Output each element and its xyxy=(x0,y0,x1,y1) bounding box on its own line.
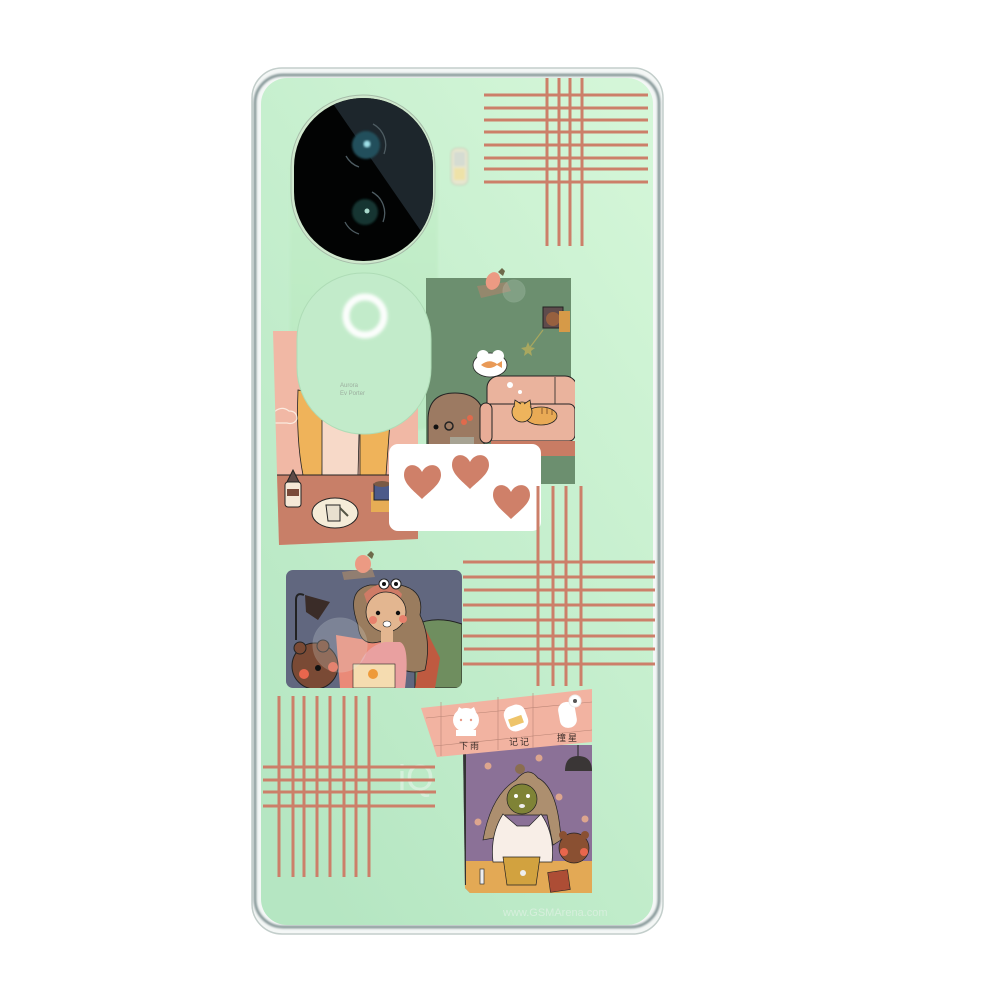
grid lines: top right xyxy=(484,78,648,246)
stars on wall xyxy=(474,754,588,826)
lamp xyxy=(296,594,330,640)
sofa xyxy=(480,376,575,484)
bunny sticker right xyxy=(557,695,581,729)
camera flash xyxy=(451,148,468,185)
girl xyxy=(353,579,428,688)
camera module xyxy=(291,95,435,264)
fish thought bubble xyxy=(473,350,507,377)
brand logo: iQ xyxy=(398,757,434,798)
pink washi tape with bunny stickers xyxy=(421,689,592,757)
carrot with tape above photo xyxy=(342,551,375,580)
wall picture xyxy=(543,307,570,332)
bunny sticker middle xyxy=(501,702,531,734)
bunny sticker left xyxy=(453,707,479,736)
sticker: pink kitchen scene xyxy=(273,331,420,547)
sweater xyxy=(492,814,553,862)
sticker: girl with popcorn and teddy xyxy=(286,570,462,689)
pink washi tape with bunny stickers: 记 记 xyxy=(509,735,529,748)
lens top xyxy=(346,124,386,167)
grid lines: middle right xyxy=(463,486,655,686)
round fingerprint pill module: Ev Porter xyxy=(340,391,365,397)
white card with hearts xyxy=(389,444,541,531)
round fingerprint pill module xyxy=(297,273,431,434)
small teddy xyxy=(559,831,589,863)
case outer frame xyxy=(252,68,663,934)
heart right xyxy=(493,485,530,519)
glowing ring xyxy=(346,297,384,335)
face with green mask xyxy=(507,784,537,814)
grid lines: lower left xyxy=(263,696,436,877)
cat xyxy=(512,400,557,425)
sticker: carrot with tape and bubble xyxy=(477,268,525,302)
plate with toast xyxy=(312,498,358,528)
phone back panel xyxy=(261,78,653,925)
sticker: girl with face mask xyxy=(463,740,592,893)
bottle xyxy=(285,470,301,507)
notebook xyxy=(548,870,570,892)
watermark: www.GSMArena.com xyxy=(502,907,608,919)
laptop xyxy=(503,857,540,885)
sticker: green room with cat on sofa xyxy=(426,278,577,484)
heart left xyxy=(404,465,441,499)
bowl xyxy=(371,481,389,512)
heart middle xyxy=(452,455,489,489)
sticker captions: 下 雨 xyxy=(459,739,479,752)
soap bubble xyxy=(313,618,367,672)
pink washi tape with bunny stickers: 撞 星 xyxy=(557,731,577,744)
hair xyxy=(483,772,561,845)
small print on module: Aurora xyxy=(340,383,359,389)
phone case product illustration xyxy=(251,67,664,935)
lens bottom xyxy=(345,192,385,234)
pendant lamp xyxy=(565,745,592,771)
teddy bear xyxy=(292,640,338,689)
